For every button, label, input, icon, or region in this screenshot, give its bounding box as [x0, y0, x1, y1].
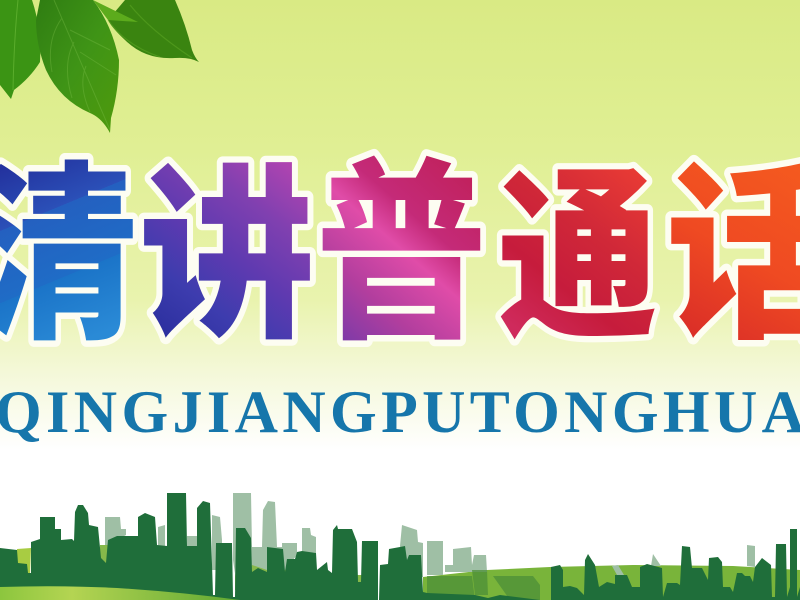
yellow-green backdrop	[17, 548, 31, 575]
skyline illustration	[0, 493, 800, 600]
dark green buildings	[0, 493, 540, 600]
subtitle: pinyin: QINGJIANGPUTONGHUA	[0, 379, 800, 445]
light hill	[423, 565, 800, 600]
character 普: 普	[316, 147, 487, 363]
pale background towers	[105, 493, 755, 580]
character 通: 通	[498, 154, 658, 362]
title: 清讲普通话	[0, 147, 800, 363]
foreground hill	[0, 586, 240, 600]
transparent green facets	[427, 570, 540, 600]
character 讲: 讲	[139, 154, 315, 362]
icon: leaves	[0, 0, 199, 133]
